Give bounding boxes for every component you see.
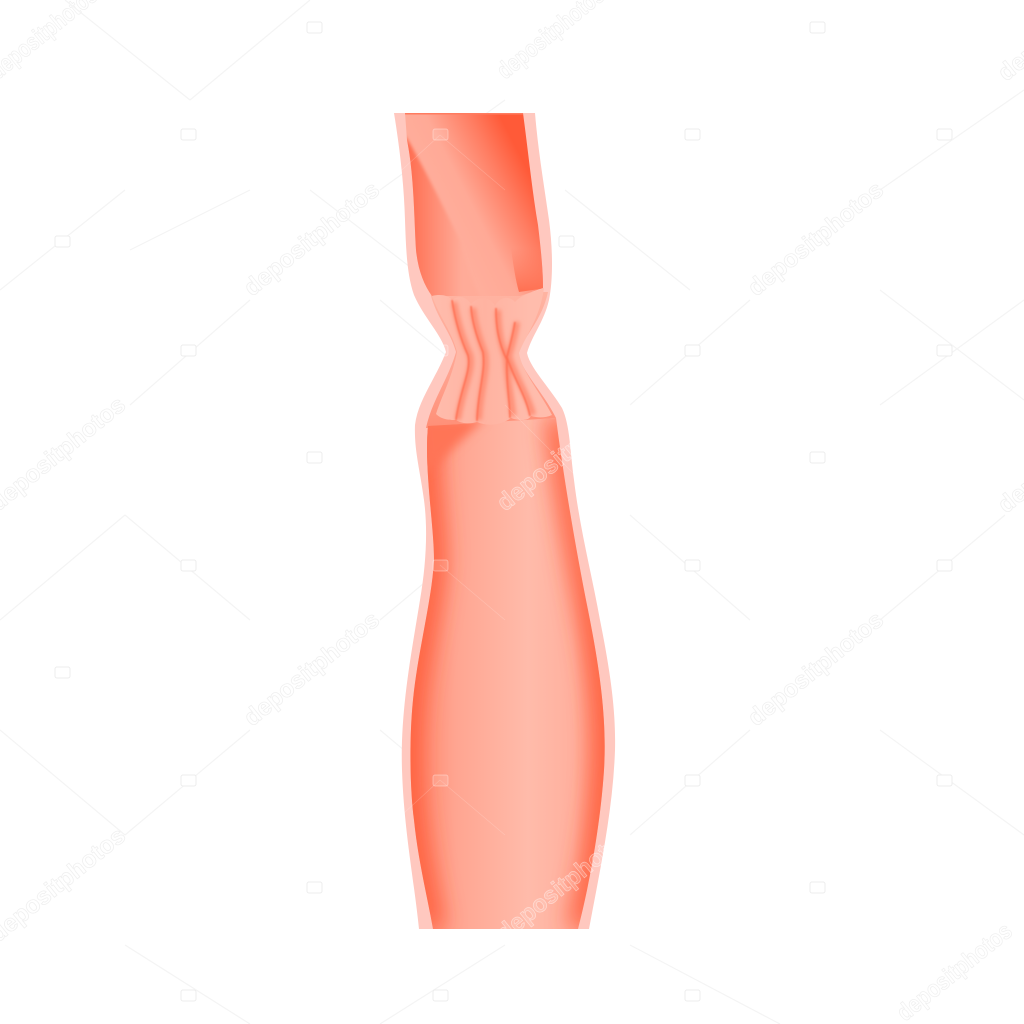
watermark over organ: depositphotos — [492, 821, 638, 947]
fold crease lines — [452, 300, 530, 421]
upper esophagus — [405, 113, 543, 296]
lower edge shading — [410, 418, 605, 929]
esophagus with stricture — [394, 110, 615, 935]
watermark over organ — [380, 129, 638, 947]
lower lumen fill — [410, 418, 605, 929]
lower rim corner — [427, 423, 484, 465]
lower esophagus — [410, 418, 605, 929]
folds mass — [432, 288, 552, 425]
watermark pattern: depositphotos — [743, 176, 889, 302]
top shadow line — [405, 113, 523, 114]
stricture lumen base — [426, 292, 556, 428]
fold shadows — [454, 302, 533, 420]
watermark pattern: depositphotos — [239, 606, 385, 732]
upper lower right dark wedge — [512, 256, 543, 292]
outer wall — [394, 113, 615, 929]
watermark pattern: depositphotos — [743, 606, 889, 732]
watermark over organ: depositphotos — [492, 391, 638, 517]
folds at stricture — [432, 288, 552, 425]
watermark pattern: depositphotos — [239, 176, 385, 302]
upper left dark wedge — [406, 136, 460, 296]
upper lumen fill — [405, 114, 543, 296]
